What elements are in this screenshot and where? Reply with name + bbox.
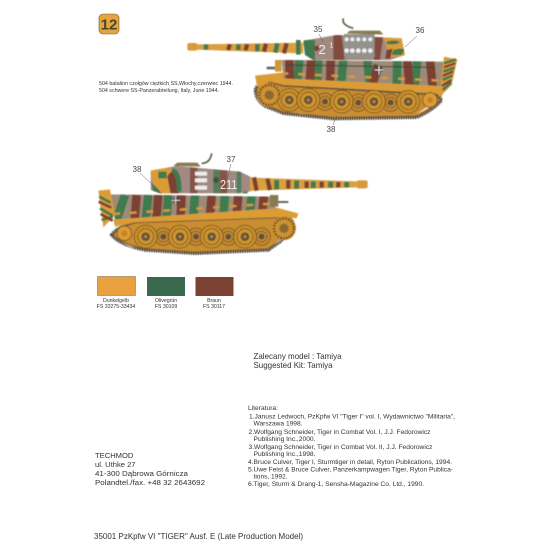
footer title: 35001 PzKpfw VI "TIGER" Ausf. E (Late Production Model) (94, 532, 303, 541)
road wheels (117, 216, 296, 248)
suggested kit text (254, 352, 342, 370)
bibliography: 4.Bruce Culver, Tiger I, Sturmtiger in detail, Ryton Publications, 1994. (248, 459, 452, 466)
bibliography: tions, 1992. (254, 474, 288, 480)
track (112, 217, 294, 253)
callout numbers: bottom tank: 38 (133, 165, 142, 174)
turret (302, 33, 407, 62)
bibliography: 3.Wolfgang Schneider, Tiger in Combat Vol. II, J.J. Fedorowicz (248, 444, 432, 451)
tank illustration: top, facing left: 2 (318, 42, 326, 57)
colour swatch: Olivegrün (147, 277, 185, 310)
tank illustration: bottom, facing right (98, 153, 368, 253)
colour swatch: Braun (196, 277, 234, 310)
upper hull camouflage (280, 58, 445, 88)
bibliography: 2.Wolfgang Schneider, Tiger in Combat Vol. I, J.J. Fedorowicz (248, 429, 430, 436)
callout numbers: bottom tank: 37 (227, 155, 236, 164)
address block: ul. Uthke 27 (95, 460, 136, 469)
address block (95, 451, 205, 487)
nose details (275, 201, 288, 203)
upper hull camouflage (110, 194, 276, 220)
bibliography: Literatura: (248, 405, 278, 412)
gun (243, 175, 357, 193)
nose details (267, 67, 280, 69)
bibliography: Publishing Inc.,1998. (254, 451, 316, 458)
bibliography: 6.Tiger, Sturm & Drang-1, Sensha-Magazine Co. Ltd., 1990. (248, 481, 424, 488)
callout numbers: top tank: 38 (327, 125, 336, 134)
exhaust armor (441, 57, 457, 93)
turret number and track-link armor (314, 34, 375, 57)
bibliography: Publishing Inc.,2000. (254, 436, 316, 443)
exhaust armor (98, 189, 115, 227)
suggested kit text: Suggested Kit: Tamiya (254, 361, 333, 370)
callout numbers: top tank (314, 25, 425, 134)
colour swatch: Dunkelgelb: FS 33275-33434 (97, 304, 135, 310)
gun (187, 43, 197, 51)
road wheels (257, 83, 437, 113)
lower hull (255, 73, 445, 97)
callout numbers: top tank: 36 (416, 26, 425, 35)
colour swatch: Olivegrün: Olivegrün (155, 298, 177, 304)
bibliography: 1.Janusz Ledwoch, PzKpfw VI "Tiger I" vol. I, Wydawnictwo "Militaria", (249, 414, 455, 420)
tank illustration: top, facing left (187, 18, 457, 119)
caption: unit description: 504 schwere SS-Panzerabteilung, Italy, June 1944. (99, 88, 219, 94)
bibliography: 5.Uwe Feist & Bruce Culver, Panzerkampwagen Tiger, Ryton Publica- (248, 466, 453, 474)
cupola and antenna (347, 31, 383, 35)
caption: unit description: 504 batalion czołgów ciężkich SS,Włochy,czerwiec 1944. (99, 81, 233, 87)
balkenkreuz (375, 66, 383, 74)
suggested kit text: Zalecany model : Tamiya (254, 352, 342, 361)
balkenkreuz (171, 196, 180, 205)
colour swatch: Olivegrün: FS 30109 (155, 304, 177, 310)
address block: Polandtel./fax. +48 32 2643692 (95, 478, 205, 487)
address block: TECHMOD (95, 451, 134, 460)
callout numbers: bottom tank (133, 155, 236, 188)
callout numbers: top tank: 35 (314, 25, 323, 34)
address block: 41-300 Dąbrowa Górnicza (95, 469, 189, 478)
lower hull (113, 208, 298, 227)
tank illustration: bottom, facing right: 211 (220, 177, 237, 192)
bibliography: Warszawa 1998. (254, 420, 303, 428)
colour swatch: Dunkelgelb: Dunkelgelb (103, 298, 129, 304)
cupola and antenna (173, 163, 201, 167)
track-link armor and marks (195, 172, 219, 190)
caption: unit description (99, 81, 233, 94)
badge: plate number 12: 12 (101, 16, 117, 34)
colour swatch: Braun: Braun (207, 298, 221, 304)
bibliography (248, 405, 455, 488)
tank illustration: top, facing left: 1 (329, 40, 333, 49)
colour swatch: Dunkelgelb (97, 276, 136, 310)
track (255, 82, 442, 119)
colour swatch: Braun: FS 30117 (203, 304, 225, 310)
turret (148, 164, 252, 195)
